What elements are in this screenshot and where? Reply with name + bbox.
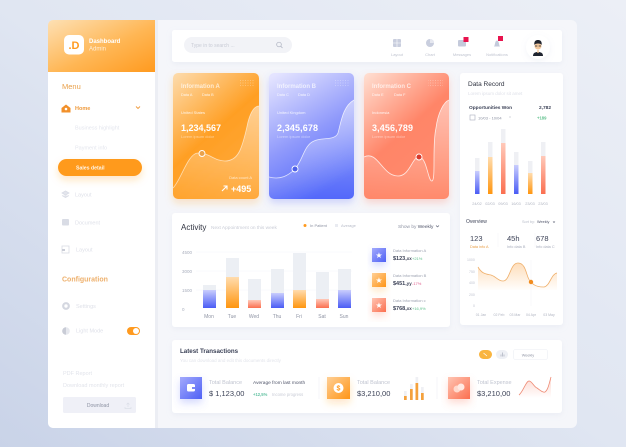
line chart: overview: 03 Mar — [510, 313, 521, 317]
line chart: overview — [467, 258, 557, 317]
bar chart: activity: 3000 — [182, 269, 193, 274]
line chart: overview: 0 — [473, 304, 475, 308]
overview stats: Info data C — [536, 245, 555, 249]
card: information C: Lorem ipsum dolor — [372, 134, 406, 139]
legend: Average — [341, 223, 357, 228]
download button: Download — [87, 403, 109, 409]
menu item: home — [62, 104, 140, 112]
line chart: overview: 01 Jan — [476, 313, 486, 317]
legend: In Patient — [310, 223, 328, 228]
total expense: $3,210,00 — [477, 389, 510, 398]
bar chart: activity: Mon — [204, 314, 214, 320]
nav icon: chart: Chart — [425, 52, 436, 57]
panel: sidebar — [48, 20, 158, 428]
overview stats: 678 — [536, 234, 549, 243]
submenu items: Business highlight — [75, 126, 120, 132]
area curve A — [173, 106, 259, 199]
bar chart: activity — [182, 250, 352, 320]
toggle buttons — [479, 350, 548, 360]
opportunities row: +189 — [537, 116, 547, 120]
line chart: overview: 1000 — [467, 258, 475, 262]
light mode toggle row: Light Mode — [76, 328, 103, 334]
panel: top bar — [172, 30, 562, 62]
overview heading: Sort by: — [522, 220, 535, 224]
total balance 2: Total Balance — [357, 380, 390, 386]
average from last month: Income progress — [272, 392, 303, 397]
menu item: document — [62, 219, 101, 226]
data item B: $451,yy — [393, 281, 412, 287]
overview stats: Info data B — [507, 245, 526, 249]
card: information A: 1,234,567 — [181, 123, 221, 133]
avatar — [526, 35, 550, 59]
data item A: $123,xx — [393, 256, 412, 262]
pdf report text — [63, 371, 125, 389]
total balance 1: $ 1,123,00 — [209, 389, 244, 398]
bar chart: activity: Sun — [340, 314, 349, 320]
submenu items — [75, 126, 120, 152]
total expense — [448, 377, 512, 399]
activity heading: Activity — [181, 223, 206, 232]
menu item: layout 2: Layout — [76, 248, 93, 254]
bar chart: data record: 24/02 — [472, 202, 482, 206]
bar chart: activity: Wed — [249, 314, 259, 320]
line chart: overview: 400 — [469, 281, 475, 285]
activity subtitle: Next Appointment on this week — [211, 225, 277, 231]
data item B: Data Information B — [393, 273, 427, 278]
bar chart: activity: Sat — [318, 314, 326, 320]
line chart: overview: 02 Feb — [494, 313, 504, 317]
total balance 2: $3,210,00 — [357, 389, 390, 398]
data item A: +21% — [412, 256, 423, 261]
mini bar chart — [404, 377, 424, 400]
card: information B: Data D — [298, 93, 310, 97]
bar chart: activity: 4500 — [182, 250, 193, 255]
card: information B — [269, 73, 354, 199]
card: information C: Data F — [394, 93, 406, 97]
total expense: Total Expense — [477, 380, 512, 386]
data item A: ★ — [375, 251, 383, 260]
data item C: ★ — [375, 301, 383, 310]
total balance 1 — [180, 377, 244, 399]
sort dropdown: Show by Weekly — [398, 224, 434, 230]
opportunities row: 10/03 - 10/04 — [478, 116, 502, 120]
panel: activity — [172, 213, 450, 327]
total balance 1: Total Balance — [209, 380, 242, 386]
data item B: ★ — [375, 276, 383, 285]
line chart: overview: 04 Apr — [526, 313, 537, 317]
card: information C: Information C — [372, 84, 412, 90]
sidebar header: .D — [68, 40, 80, 52]
legend — [304, 223, 357, 228]
card: information C — [364, 73, 449, 199]
card: information C: Indonesia — [372, 110, 390, 115]
bar chart: activity: 0 — [182, 307, 185, 312]
submenu items: Payment info — [75, 146, 107, 152]
card: information C: 3,456,789 — [372, 123, 413, 133]
data item A: Data Information A — [393, 248, 426, 253]
average from last month: +12,5% — [253, 392, 268, 397]
menu item: layout 2 — [62, 246, 93, 254]
overview stats: 45h — [507, 234, 520, 243]
card: information B: 2,345,678 — [277, 123, 318, 133]
bar chart: data record — [472, 129, 548, 206]
opportunities row: Opportunities Won — [469, 105, 512, 111]
nav icon: messages — [453, 37, 471, 57]
nav icon: messages: Messages — [453, 52, 471, 57]
card: information A: Data count A — [229, 175, 252, 180]
toggle buttons: Weekly — [522, 354, 534, 358]
nav icon: notifications: Notifications — [486, 52, 508, 57]
card: information B: Information B — [277, 84, 317, 90]
menu heading: Menu — [62, 82, 81, 91]
bar chart: activity: 1500 — [182, 288, 193, 293]
bar chart: activity: Thu — [273, 314, 282, 320]
area curve B — [269, 100, 354, 199]
search box: Type in to search ... — [191, 43, 235, 49]
line chart: overview: 200 — [469, 293, 475, 297]
overview heading — [466, 219, 555, 225]
panel: data record — [460, 73, 563, 325]
transactions subtitle: You can download and edit this documents directly — [180, 358, 282, 363]
menu item: layout: Layout — [75, 192, 92, 198]
card: information A: Data B — [202, 93, 214, 97]
total balance 2 — [327, 377, 390, 399]
menu item: layout — [62, 191, 92, 198]
data item C: $768,xx — [393, 306, 412, 312]
data item A — [372, 248, 426, 262]
nav icon: notifications — [486, 36, 508, 57]
dashboard shell — [48, 20, 577, 428]
card: information A: Information A — [181, 84, 220, 90]
overview stats: Data info A — [470, 245, 489, 249]
bar chart: data record: 09/03 — [498, 202, 508, 206]
overview heading: Overview — [466, 219, 487, 225]
nav icon: layout — [391, 39, 404, 57]
pdf report text: PDF Report — [63, 371, 93, 377]
nav icon: chart — [425, 39, 436, 57]
sparkline — [519, 377, 551, 398]
transactions heading: Latest Transactions — [180, 348, 239, 355]
card: information A: United States — [181, 110, 205, 115]
overview heading: Weekly — [537, 220, 549, 224]
card: information A: Data A — [181, 93, 193, 97]
line chart: overview: 750 — [469, 270, 475, 274]
data record heading: Data Record — [468, 81, 505, 88]
panel: latest transactions — [172, 340, 562, 413]
data item C — [372, 298, 426, 312]
line chart: overview: 03 May — [543, 313, 555, 317]
pdf report text: Download monthly report — [63, 383, 125, 389]
opportunities row — [469, 105, 551, 120]
nav icon: layout: Layout — [391, 52, 404, 57]
card: information A: Lorem ipsum dolor — [181, 134, 215, 139]
light mode toggle row — [62, 327, 140, 335]
overview stats — [470, 233, 555, 249]
average from last month: Average from last month — [253, 380, 306, 386]
search box — [184, 37, 292, 53]
data item B: -17% — [412, 281, 422, 286]
active menu pill: sales detail — [58, 159, 142, 176]
average from last month — [253, 380, 306, 397]
card: information B: Lorem ipsum dolor — [277, 134, 311, 139]
card: information A — [173, 73, 259, 199]
area curve C — [364, 100, 449, 188]
settings item — [63, 303, 96, 310]
arrow up right — [222, 186, 227, 191]
download button — [63, 397, 136, 413]
bar chart: data record: 23/03 — [525, 202, 535, 206]
bar chart: data record: 23/03 — [538, 202, 548, 206]
configuration heading: Configuration — [62, 276, 108, 284]
active menu pill: sales detail: Sales detail — [76, 166, 105, 172]
sidebar header: Dashboard — [89, 39, 121, 45]
bar chart: activity: Tue — [228, 314, 236, 320]
settings item: Settings — [76, 304, 96, 310]
card: information B: Data C — [277, 93, 289, 97]
data item C: +16,9% — [412, 306, 426, 311]
bar chart: data record: 16/03 — [511, 202, 521, 206]
bar chart: activity: Fri — [296, 314, 302, 320]
sidebar header: Admin — [89, 46, 106, 52]
data item B — [372, 273, 427, 287]
card: information C: Data E — [372, 93, 384, 97]
menu item: document: Document — [75, 220, 101, 226]
data item C: Data Information c — [393, 298, 426, 303]
sidebar header — [48, 20, 155, 72]
overview stats: 123 — [470, 234, 483, 243]
data record subtitle: Lorem ipsum dolor sit amet — [468, 91, 523, 96]
menu item: home: Home — [75, 106, 90, 112]
card: information A: +495 — [231, 184, 251, 194]
bar chart: data record: 02/03 — [485, 202, 495, 206]
total balance 2: $ — [337, 386, 341, 392]
card: information B: United Kingdom — [277, 110, 306, 115]
opportunities row: 2,782 — [539, 105, 551, 111]
